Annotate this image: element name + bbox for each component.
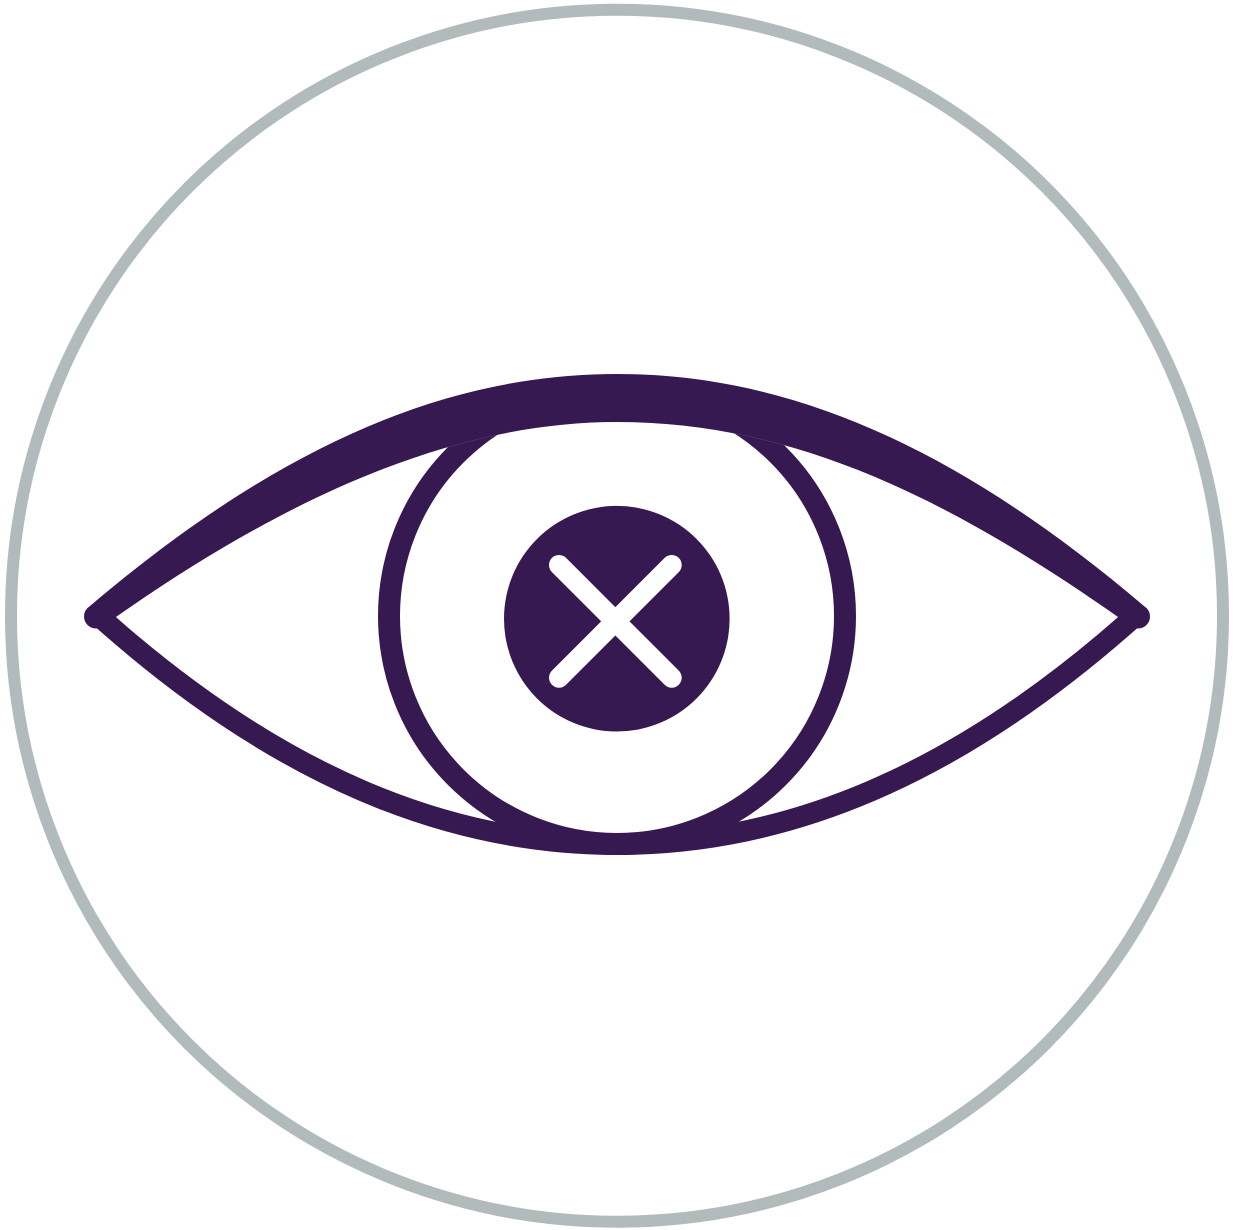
area above the lid that hides the top of the iris ring: [116, 340, 1118, 617]
iris ring: [389, 388, 845, 844]
lower lid: [100, 617, 1134, 844]
left eye corner: [84, 604, 108, 628]
cross mark: [559, 565, 672, 678]
eye: [84, 340, 1150, 844]
upper lid: [90, 374, 1144, 617]
right eye corner: [1126, 604, 1150, 628]
pupil: [504, 506, 730, 732]
